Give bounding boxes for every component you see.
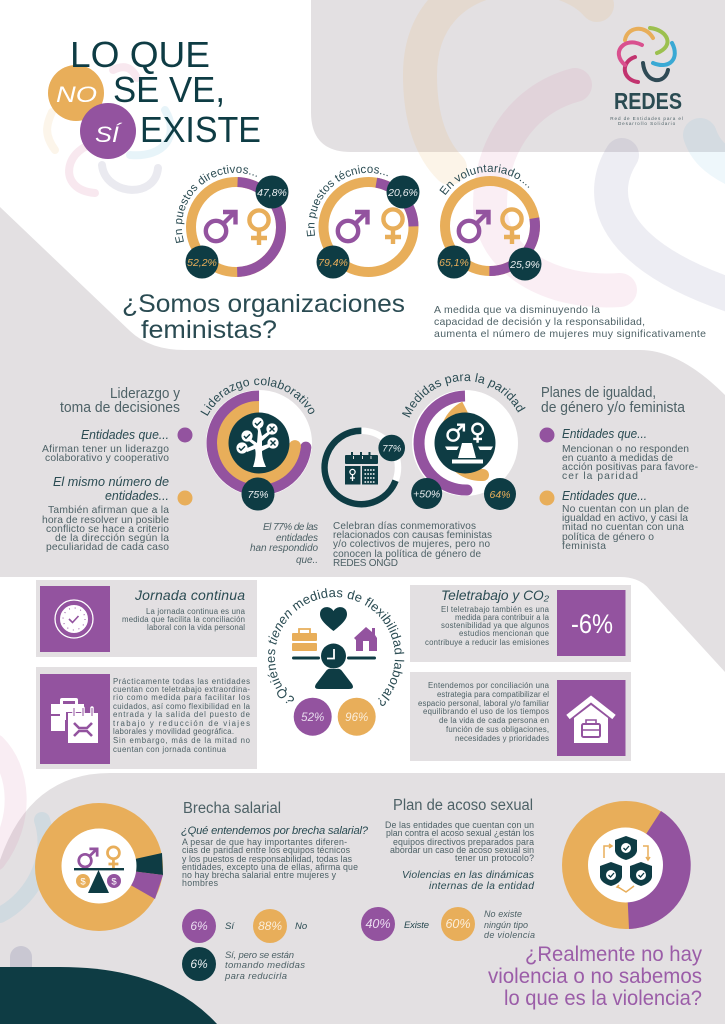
text block: liderazgo y toma de decisiones: de la dirección según la (55, 533, 169, 544)
chart: días conmemorativos 77%: 77% (382, 444, 402, 454)
panel: conciliación: estrategia para compatibilizar el (437, 690, 549, 699)
closing question (488, 942, 702, 1010)
icon: heart (320, 607, 347, 631)
legend: violencias: 40% (365, 917, 391, 931)
chart: en puestos técnicos (306, 165, 420, 278)
text block: brecha salarial: hombres (182, 878, 219, 888)
text: celebran días conmemorativos: Celebran días conmemorativos (333, 521, 476, 532)
panel: conciliación: Entendemos por conciliación una (428, 681, 550, 690)
legend: brecha salarial: 6% (190, 957, 208, 971)
title: SE VE, (113, 69, 225, 110)
text block: planes de igualdad: acción positivas para favore- (562, 462, 698, 473)
text block: planes de igualdad: de género y/o feminista (541, 399, 686, 416)
chart: medidas para la paridad: Medidas para la paridad (402, 373, 526, 418)
title: LO QUE (70, 34, 210, 75)
panel: teletrabajo y CO2: Teletrabajo y CO₂ (441, 587, 550, 603)
text block: liderazgo y toma de decisiones: hora de resolver un posible (42, 515, 169, 526)
panel: jornada continua: Jornada continua (134, 587, 245, 603)
decorative large arcs top right (420, 0, 725, 295)
text block: planes de igualdad: No cuentan con un plan de (562, 504, 689, 515)
text block: planes de igualdad: en cuanto a medidas de (562, 453, 673, 464)
icon: clock scale person (292, 644, 376, 689)
panel: conciliación: de la vida de cada persona en (439, 716, 549, 725)
legend: violencias: Existe (404, 920, 429, 931)
chart: en puestos técnicos: 79,4% (318, 257, 348, 269)
text: celebran días conmemorativos: relacionados con causas feministas (333, 530, 492, 541)
chart: en puestos directivos (174, 165, 288, 278)
icon: briefcase (292, 629, 317, 651)
panel: teletrabajo extraordinario: cuentan con jornada continua (113, 745, 227, 754)
legend: brecha salarial: para reducirla (224, 971, 287, 982)
text block: brecha salarial: y los puestos de responsabilidad, todas las (182, 854, 353, 864)
text block: liderazgo y toma de decisiones: Entidades que... (81, 427, 169, 442)
legend: violencias: ningún tipo (484, 920, 528, 930)
text block: plan de acoso sexual: De las entidades que cuentan con un (385, 820, 534, 830)
text block: brecha salarial: ¿Qué entendemos por brecha salarial? (181, 825, 369, 837)
panel: conciliación (410, 672, 631, 761)
icon: shields (600, 836, 652, 892)
text block: liderazgo y toma de decisiones: El mismo número de (53, 474, 169, 489)
text block: liderazgo y toma de decisiones: conflicto se hace a criterio (46, 524, 169, 535)
panel: teletrabajo extraordinario: cuentan con teletrabajo extraordina- (113, 685, 250, 694)
text block: plan de acoso sexual: abordar un caso de acoso sexual sin (390, 845, 534, 855)
text block: liderazgo y toma de decisiones: toma de decisiones (60, 399, 180, 416)
chart: en voluntariado: 25,9% (509, 259, 540, 271)
panel: teletrabajo extraordinario (36, 667, 257, 769)
panel: conciliación: espacio personal, laboral y/o familiar (418, 699, 549, 708)
panel: teletrabajo extraordinario: cuidados, así como flexibilidad en la (113, 702, 251, 711)
logo: REDES: Red de Entidades para el (610, 116, 684, 121)
chart: en puestos técnicos: En puestos técnicos... (306, 165, 388, 236)
panel: jornada continua (36, 580, 257, 657)
panel: teletrabajo y CO2: sostenibilidad ya que algunos (441, 621, 549, 630)
text block: brecha salarial: cias de paridad entre los equipos técnicos (182, 845, 351, 855)
panel: teletrabajo y CO2: medida para contribuir a la (455, 613, 550, 622)
text block: brecha salarial: A pesar de que hay importantes diferen- (182, 837, 347, 847)
icon: house (354, 627, 377, 651)
text block: liderazgo y toma de decisiones: También afirman que a la (48, 505, 169, 516)
text block: planes de igualdad: Planes de igualdad, (541, 384, 656, 401)
text: disminuyendo capacidad: A medida que va disminuyendo la (434, 304, 600, 316)
text block: planes de igualdad: Mencionan o no responden (562, 444, 689, 455)
legend: brecha salarial: 88% (258, 919, 282, 933)
legend: brecha salarial: 6% (190, 919, 208, 933)
legend: brecha salarial: Sí (225, 921, 235, 932)
text block: planes de igualdad: igualdad en activo, y casi la (562, 513, 688, 524)
panel: conciliación: función de sus obligaciones, (446, 725, 549, 734)
chart: días conmemorativos 77% (314, 420, 409, 515)
text block: liderazgo y toma de decisiones: peculiaridad de cada caso (46, 542, 169, 553)
text block: liderazgo y toma de decisiones: colaborativo y cooperativo (45, 453, 169, 464)
legend: brecha salarial: tomando medidas (225, 960, 305, 971)
chart: en puestos directivos: 47,8% (257, 187, 287, 199)
chart: flexibilidad laboral: ¿Quiénes tienen medidas de flexibilidad laboral? (268, 588, 404, 706)
legend: brecha salarial: Sí, pero se están (225, 950, 294, 961)
legend: violencias: No existe (484, 909, 522, 919)
text: el 77% de las entidades: han respondido (250, 543, 318, 554)
panel: teletrabajo extraordinario: trabajo y reducción de viajes (113, 719, 250, 728)
chart: en puestos directivos: 52,2% (187, 257, 217, 269)
text block: planes de igualdad: mitad no cuentan con una (562, 522, 684, 533)
title (48, 34, 261, 159)
panel: teletrabajo extraordinario: entrada y la salida del puesto de (113, 710, 250, 719)
panel: teletrabajo extraordinario: rio como medida para facilitar los (113, 693, 250, 702)
legend: violencias (361, 907, 535, 941)
text block: brecha salarial: Brecha salarial (183, 800, 281, 817)
chart: medidas para la paridad: 64% (489, 489, 511, 501)
chart: medidas para la paridad (402, 373, 526, 510)
chart: liderazgo colaborativo: Liderazgo colaborativo (200, 377, 314, 416)
text block: plan de acoso sexual: equipos directivos preparados para (393, 837, 534, 847)
icon: tree (236, 417, 279, 467)
panel: jornada continua: laboral con la vida personal (147, 623, 245, 632)
text: el 77% de las entidades: entidades (276, 533, 318, 544)
chart: flexibilidad laboral: 52% (301, 712, 324, 724)
legend: brecha salarial: No (295, 921, 307, 932)
panel: teletrabajo extraordinario: laborales y movilidad geográfica. (113, 727, 234, 736)
closing question: violencia o no sabemos (488, 964, 702, 988)
icon: briefcase and calendar (51, 698, 98, 743)
logo: REDES: REDES (614, 88, 682, 114)
text block: brecha salarial (181, 800, 369, 888)
icon: clock (55, 600, 93, 638)
legend: brecha salarial (182, 909, 307, 982)
panel: conciliación: equilibrando el uso de los tiempos (423, 707, 549, 716)
text block: planes de igualdad: cer la paridad (562, 471, 638, 482)
text block: liderazgo y toma de decisiones: entidades... (105, 488, 169, 503)
text: disminuyendo capacidad (434, 304, 706, 340)
chart: brecha salarial donut (35, 803, 163, 931)
logo: REDES (610, 28, 684, 126)
panel: teletrabajo y CO2: El teletrabajo también es una (441, 605, 550, 614)
text block: plan de acoso sexual: internas de la entidad (429, 881, 535, 892)
decorative arcs behind title (47, 67, 171, 193)
chart: en voluntariado: 65,1% (439, 257, 469, 269)
heading: somos organizaciones feministas: feministas? (141, 316, 277, 344)
text block: liderazgo y toma de decisiones: Liderazgo y (110, 385, 180, 402)
icon: gender pay scale: $ (111, 876, 117, 888)
chart: violencia donut (562, 801, 691, 929)
chart: en puestos directivos: En puestos directivos... (174, 165, 257, 244)
text: el 77% de las entidades (250, 522, 318, 566)
chart: medidas para la paridad: +50% (413, 488, 440, 500)
chart: en voluntariado: En voluntariado.... (439, 164, 530, 195)
text: disminuyendo capacidad: aumenta el número de mujeres muy significativamente (434, 328, 706, 340)
text block: planes de igualdad (540, 384, 698, 552)
bottom-left dark shape (0, 967, 217, 1024)
panel: teletrabajo y CO2: -6% (571, 609, 613, 639)
heading: somos organizaciones feministas (122, 290, 405, 344)
panel: teletrabajo extraordinario: Prácticamente todas las entidades (113, 677, 250, 686)
chart: liderazgo colaborativo (200, 377, 314, 510)
logo: REDES: Desarrollo Solidario (618, 121, 676, 126)
title: SÍ (95, 122, 122, 147)
text: celebran días conmemorativos (333, 521, 492, 569)
text block: brecha salarial: no hay brecha salarial entre mujeres y (182, 870, 337, 880)
icon: calendar (345, 452, 378, 484)
icon: gender scale (445, 424, 493, 464)
text: celebran días conmemorativos: y/o colectivos de mujeres, pero no (333, 539, 490, 550)
text block: planes de igualdad: Entidades que... (562, 426, 647, 441)
chart: liderazgo colaborativo: 75% (247, 489, 269, 501)
legend: violencias: 60% (445, 917, 471, 931)
panel: conciliación: necesidades y prioridades (455, 734, 549, 743)
legend: violencias: de violencia (484, 930, 535, 940)
heading: somos organizaciones feministas: ¿Somos organizaciones (122, 290, 405, 318)
text: el 77% de las entidades: que.. (296, 555, 318, 566)
panel: jornada continua: medida que facilita la conciliación (122, 615, 245, 624)
text block: planes de igualdad: Entidades que... (562, 488, 647, 503)
text block: liderazgo y toma de decisiones (42, 385, 192, 553)
text block: plan de acoso sexual: plan contra el acoso sexual ¿están los (386, 828, 535, 838)
text block: plan de acoso sexual: Plan de acoso sexual (393, 797, 533, 814)
panel: teletrabajo y CO2: estudios mencionan que (459, 629, 549, 638)
icon: house with briefcase (568, 699, 614, 743)
closing question: lo que es la violencia? (504, 986, 702, 1010)
title: NO (56, 82, 97, 107)
text: el 77% de las entidades: El 77% de las (263, 522, 318, 533)
text block: planes de igualdad: feminista (562, 541, 606, 552)
chart: en voluntariado (438, 164, 542, 280)
panel: teletrabajo y CO2: contribuye a reducir las emisiones (425, 638, 549, 647)
chart: en puestos técnicos: 20,6% (387, 187, 418, 199)
text block: brecha salarial: entidades, excepto una de ellas, afirma que (182, 862, 358, 872)
icon: gender pay scale: $ (80, 876, 86, 888)
text block: plan de acoso sexual: Violencias en las dinámicas (402, 870, 534, 881)
text: disminuyendo capacidad: capacidad de decisión y la responsabilidad, (434, 316, 645, 328)
panel: teletrabajo extraordinario: Sin embargo, más de la mitad no (113, 736, 251, 745)
chart: flexibilidad laboral: 96% (345, 712, 368, 724)
text block: planes de igualdad: política de género o (562, 532, 654, 543)
text: celebran días conmemorativos: REDES ONGD (333, 558, 398, 569)
text block: liderazgo y toma de decisiones: Afirman tener un liderazgo (42, 444, 169, 455)
closing question: ¿Realmente no hay (525, 942, 702, 966)
text block: plan de acoso sexual (385, 797, 535, 892)
decorative arcs lower left (0, 745, 46, 985)
text block: plan de acoso sexual: tener un protocolo? (455, 853, 534, 863)
panel: teletrabajo y CO2 (410, 585, 631, 662)
icon: gender pay scale (74, 847, 124, 893)
text: celebran días conmemorativos: conocen la política de género de (333, 549, 481, 560)
title: EXISTE (140, 109, 261, 150)
panel: jornada continua: La jornada continua es una (146, 607, 246, 616)
